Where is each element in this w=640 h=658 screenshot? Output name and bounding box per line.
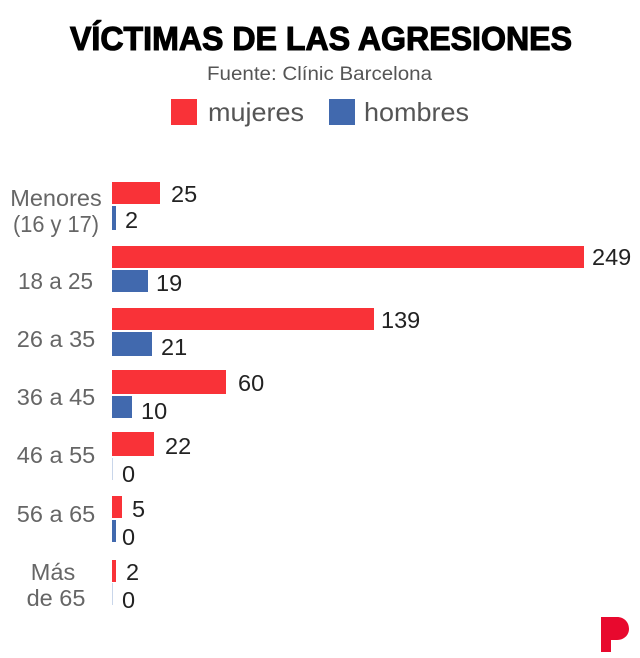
row: Menores (16 y 17): Menores xyxy=(10,185,102,211)
row: 56 a 65: 56 a 65 xyxy=(17,501,95,527)
row: 56 a 65: 5 xyxy=(132,496,145,522)
bar chart xyxy=(10,181,631,613)
row: 18 a 25: 18 a 25 xyxy=(18,268,93,294)
row: Más de 65: de 65 xyxy=(27,585,85,611)
row: Más de 65: 0 xyxy=(122,587,135,613)
row: 36 a 45: 10 xyxy=(141,398,167,424)
row: Menores (16 y 17): 2 xyxy=(125,207,138,233)
row: Más de 65 xyxy=(27,559,139,613)
row: 26 a 35 xyxy=(17,307,420,360)
row: 46 a 55 xyxy=(17,432,191,487)
row: Menores (16 y 17): 25 xyxy=(171,181,197,207)
row: Menores (16 y 17): (16 y 17) xyxy=(13,211,99,237)
row: Más de 65: Más xyxy=(31,559,75,585)
row: Más de 65: 2 xyxy=(126,559,139,585)
legend item: mujeres xyxy=(171,97,304,127)
source line: Fuente: Clínic Barcelona xyxy=(207,64,432,85)
legend xyxy=(171,97,469,127)
title: VÍCTIMAS DE LAS AGRESIONES xyxy=(70,20,572,57)
row: 26 a 35: 139 xyxy=(381,307,420,333)
row: 46 a 55: 46 a 55 xyxy=(17,442,95,468)
icon: publisher logo P xyxy=(601,617,629,652)
row: 56 a 65: 0 xyxy=(122,524,135,550)
row: 36 a 45: 36 a 45 xyxy=(17,384,95,410)
legend item: mujeres: mujeres xyxy=(208,97,304,127)
legend item: hombres: hombres xyxy=(364,97,469,127)
row: 36 a 45 xyxy=(17,370,264,424)
row: 18 a 25 xyxy=(18,244,631,296)
row: 26 a 35: 26 a 35 xyxy=(17,326,95,352)
row: 56 a 65 xyxy=(17,496,145,550)
row: 26 a 35: 21 xyxy=(161,334,187,360)
row: 46 a 55: 22 xyxy=(165,433,191,459)
row: 18 a 25: 249 xyxy=(592,244,631,270)
row: 46 a 55: 0 xyxy=(122,461,135,487)
row: Menores (16 y 17) xyxy=(10,181,197,237)
row: 18 a 25: 19 xyxy=(156,270,182,296)
row: 36 a 45: 60 xyxy=(238,370,264,396)
